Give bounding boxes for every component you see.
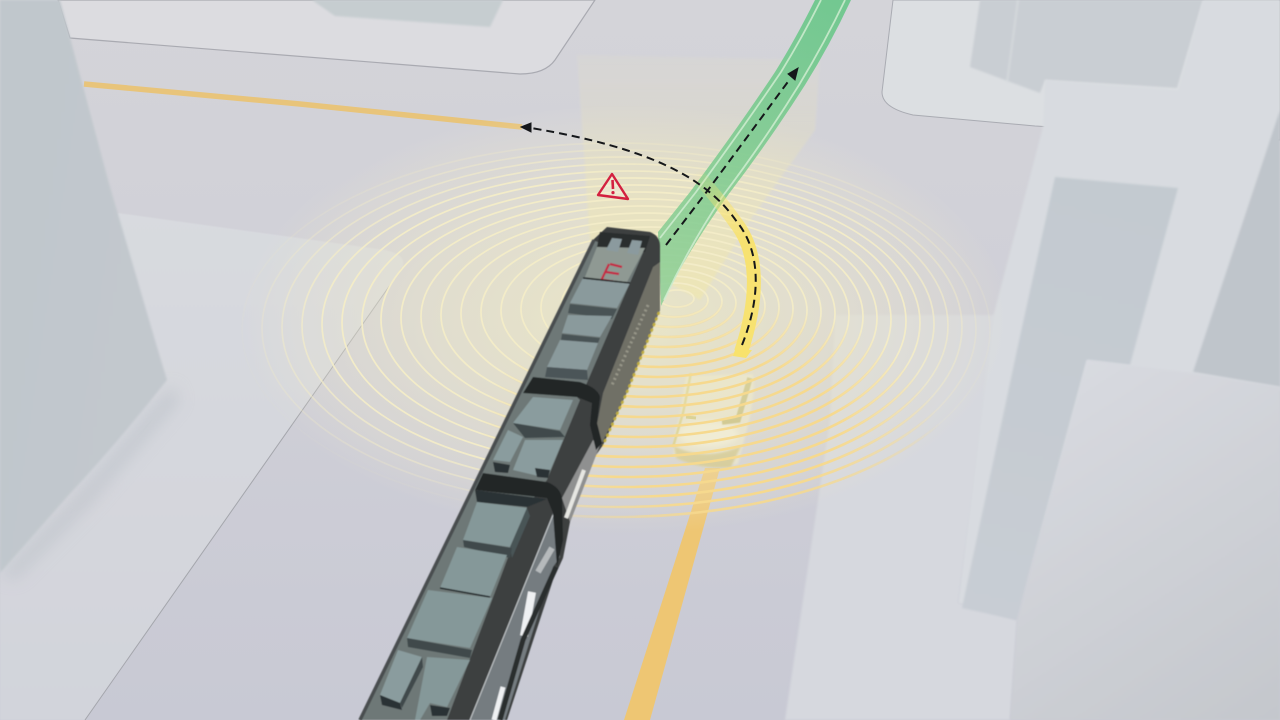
tram roof base — [360, 240, 645, 720]
tram roof panels: front car — [545, 278, 630, 380]
tram head: dark windscreen band — [597, 232, 650, 252]
arrow: car turning path — [521, 123, 756, 345]
tram side glass, first car — [597, 262, 660, 445]
warning light beam — [577, 55, 820, 300]
sidewalk: road edge line — [85, 268, 402, 720]
tram joint: second articulation — [475, 473, 563, 567]
warning zone glow — [240, 105, 1010, 535]
sidewalk: top right block — [882, 0, 1280, 140]
tram side glass, rear car — [470, 513, 560, 720]
tram silhouette — [360, 227, 660, 720]
sidewalk: lower right block — [785, 315, 1017, 720]
icon: warning triangle — [598, 174, 628, 199]
car: ghosted vehicle — [673, 373, 754, 468]
building: left tall — [0, 0, 180, 580]
sidewalk: top left block — [58, 0, 595, 74]
tram side glass, middle car — [562, 440, 600, 522]
arrow: tram straight path — [666, 68, 798, 245]
tram roof panels: middle car — [493, 397, 573, 478]
sensor rings: concentric warning waves — [242, 143, 990, 517]
tram head: red sensor mark — [601, 264, 622, 282]
building: top right — [970, 0, 1203, 93]
tram head: front roof blocks — [585, 238, 645, 282]
road line: bottom orange lane — [624, 468, 720, 720]
tram joint: first articulation — [523, 377, 602, 450]
tram roof panels: rear car — [380, 490, 547, 720]
path: green tram trajectory — [658, 0, 851, 306]
building: bottom right — [1010, 360, 1280, 720]
tram: articulated vehicle from above — [360, 227, 660, 720]
building: top center base — [312, 0, 503, 27]
building: right middle — [958, 0, 1280, 620]
sidewalk: left triangular block — [0, 213, 403, 720]
tram rim: left edge — [360, 240, 594, 720]
path: yellow car trajectory — [695, 172, 754, 358]
road line: left orange lane — [84, 84, 522, 127]
